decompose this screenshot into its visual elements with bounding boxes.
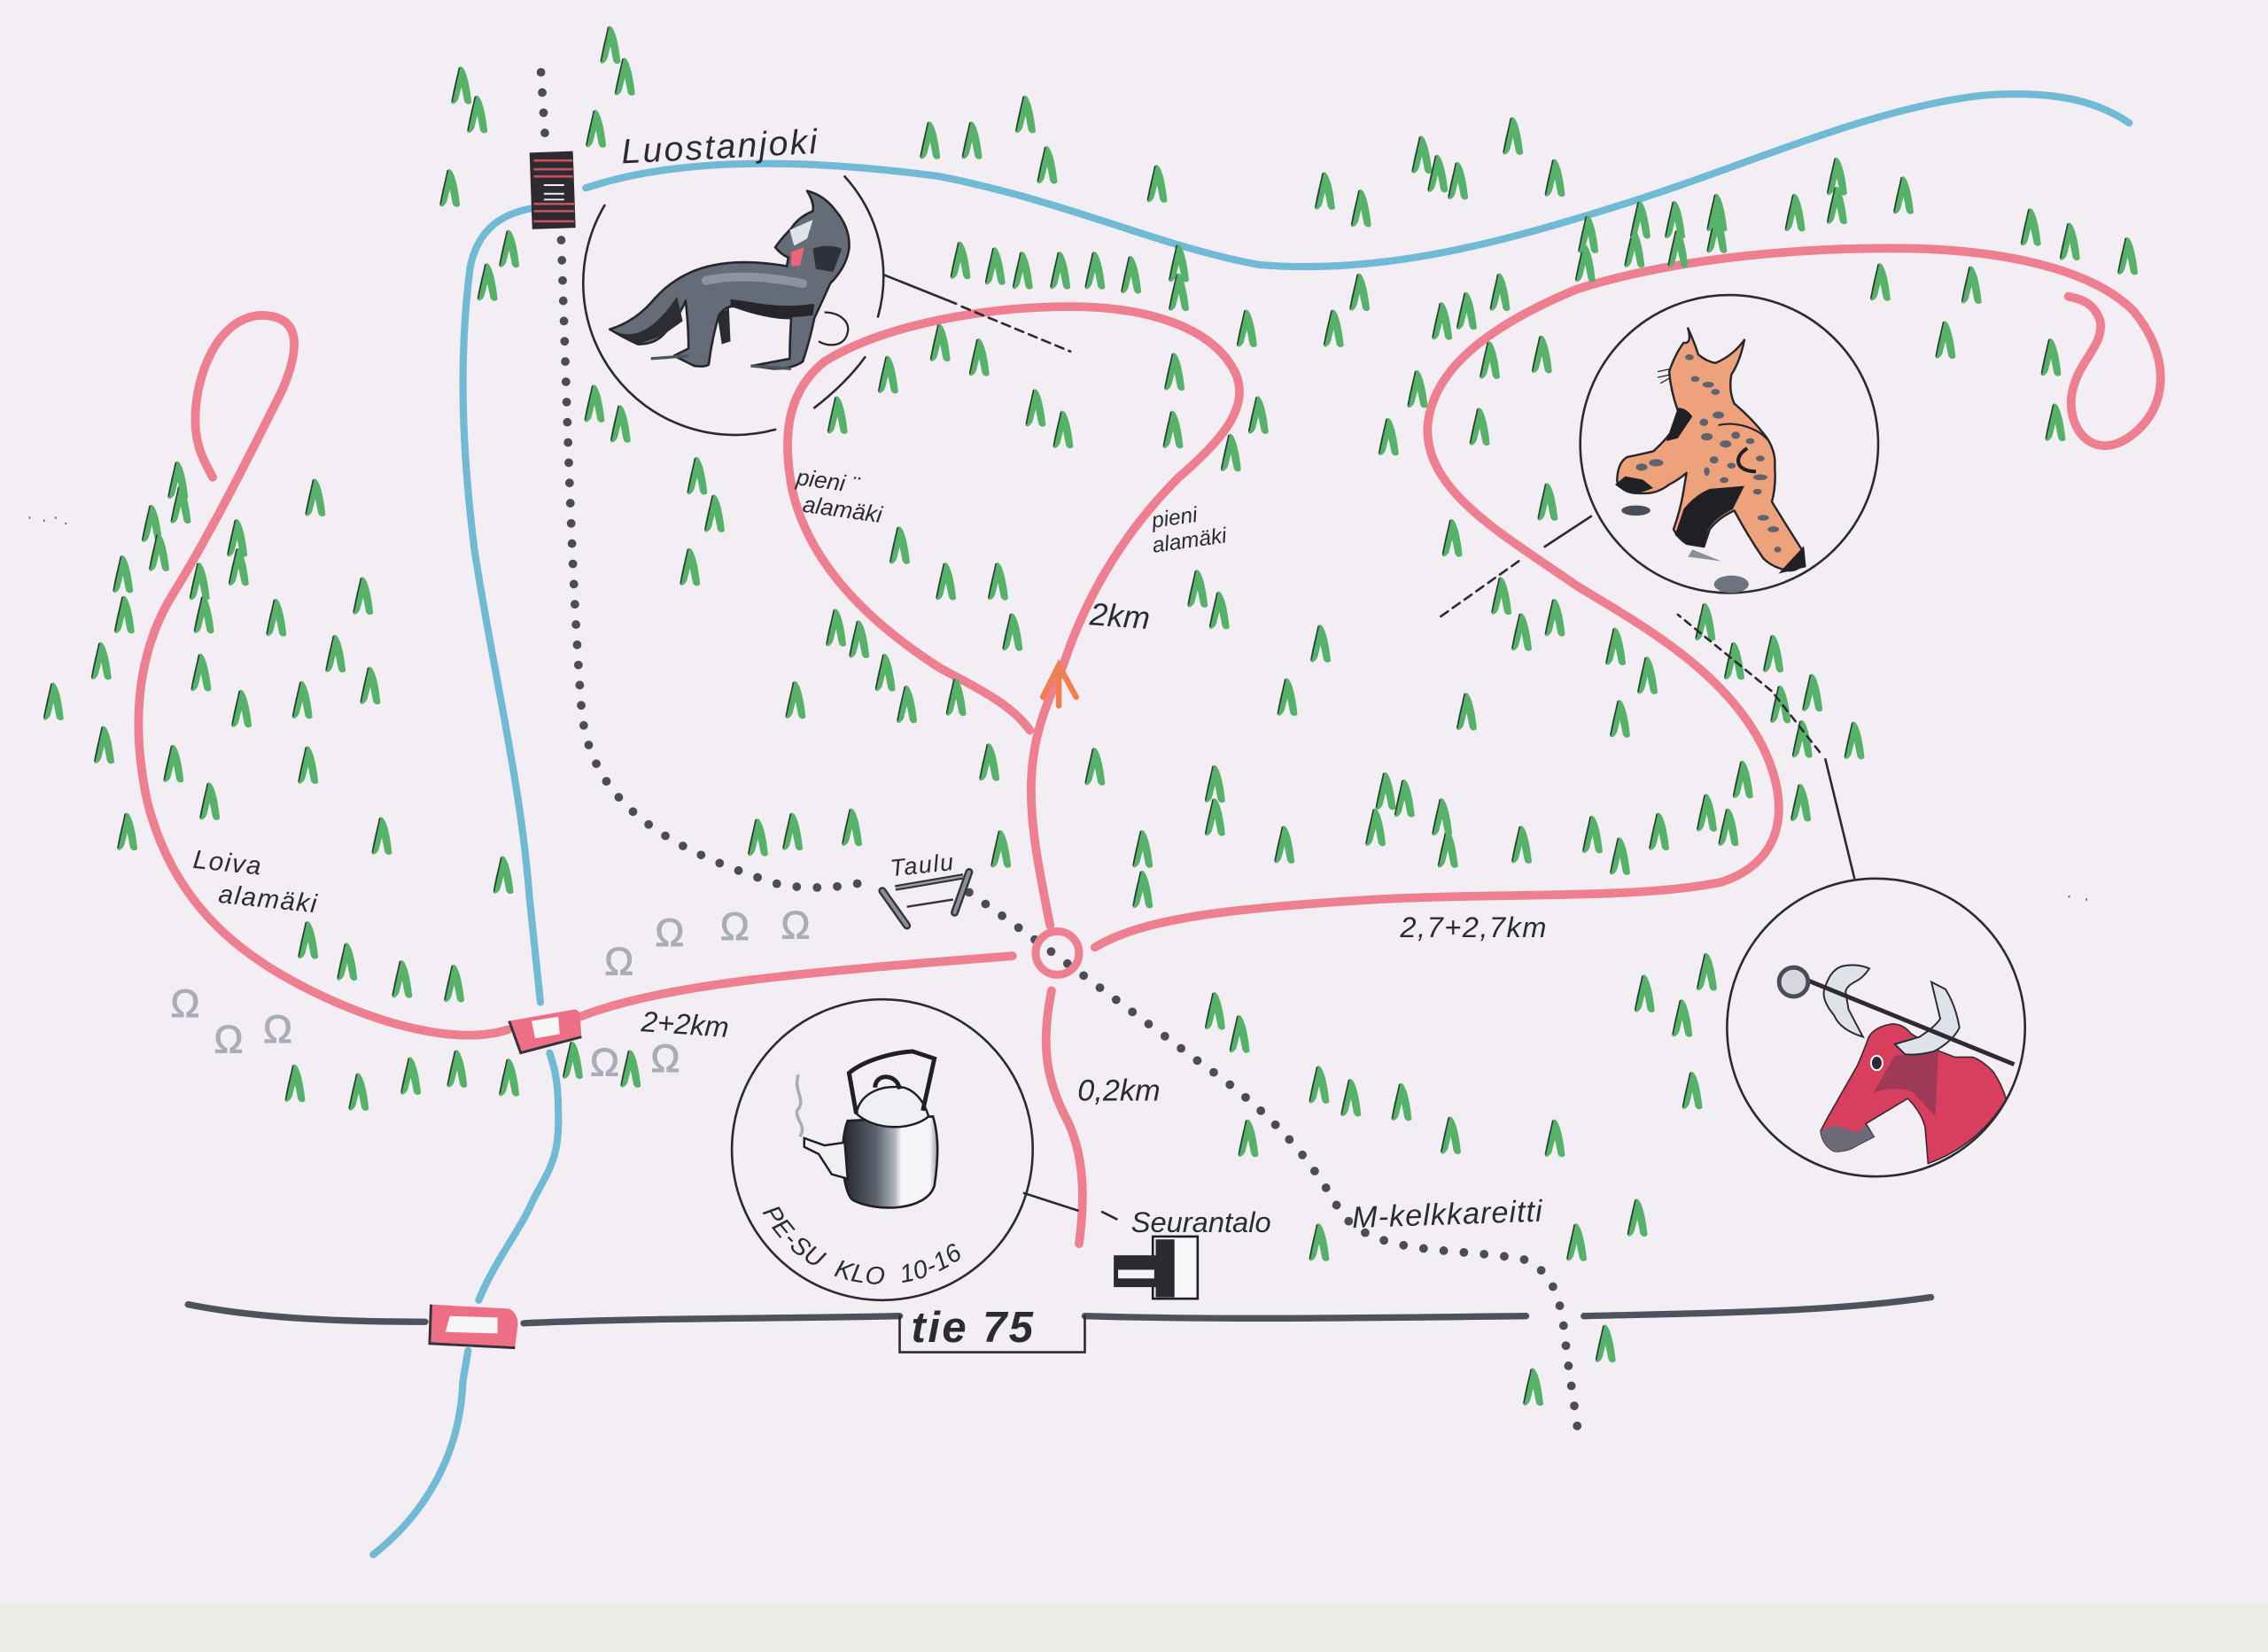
kettle opening hours: PE-SU KLO 10-16 <box>762 1206 960 1284</box>
scan specks <box>29 517 2087 900</box>
moose circle outline <box>1727 879 2025 1176</box>
label pieni alamaki right: alamäki <box>1151 524 1229 558</box>
lynx drawing <box>1617 329 1804 593</box>
direction arrow <box>1043 665 1076 706</box>
sign Taulu <box>882 849 969 926</box>
trees: north <box>439 26 2138 311</box>
sign Taulu: Taulu <box>889 849 956 881</box>
label 2+2km: 2+2km <box>640 1004 730 1043</box>
moose drawing <box>1779 965 2014 1163</box>
moose circle leaders <box>1678 615 1854 878</box>
scanner strip at bottom <box>0 1603 2268 1652</box>
trees: west <box>43 461 641 1111</box>
label 2,7+2,7km: 2,7+2,7km <box>1399 911 1548 943</box>
ski trail: bridge to junction <box>580 956 1013 1017</box>
grey rock symbols: Ω <box>604 940 633 983</box>
grey rock symbols: Ω <box>590 1042 619 1085</box>
label pieni alamaki right <box>1147 500 1229 558</box>
lynx circle outline <box>1581 295 1878 593</box>
label Loiva alamaki: alamäki <box>217 880 320 919</box>
grey rock symbols: Ω <box>651 1037 680 1081</box>
label tie 75: tie 75 <box>912 1304 1035 1352</box>
wolf drawing <box>610 191 850 368</box>
label 2km: 2km <box>1088 595 1151 636</box>
wolf circle leader <box>884 275 1070 352</box>
label pieni alamaki right: pieni <box>1149 503 1200 533</box>
grey rock symbols: Ω <box>720 905 750 949</box>
road bridge <box>430 1305 517 1348</box>
building Seurantalo <box>1114 1237 1198 1299</box>
road 75 <box>188 1297 1931 1353</box>
kettle drawing <box>796 1051 937 1207</box>
wolf circle <box>583 176 883 435</box>
trees: centre loop <box>585 309 1269 908</box>
label Seurantalo: Seurantalo <box>1131 1206 1271 1238</box>
label Pieni alamaki left <box>790 463 889 528</box>
ski trail: south branch <box>1046 990 1083 1244</box>
label Luostanjoki: Luostanjoki <box>620 123 820 171</box>
label M-kelkkareitti: M-kelkkareitti <box>1351 1195 1544 1235</box>
trees: east <box>1274 263 2065 875</box>
lynx circle <box>1581 295 1878 593</box>
snowmobile route dotted <box>541 73 1578 1431</box>
grey rock symbols: Ω <box>655 911 684 955</box>
grey rock symbols: Ω <box>171 982 199 1026</box>
grey rock symbols <box>171 904 810 1085</box>
wolf circle outline <box>583 176 883 435</box>
pink bridge on trail <box>509 1010 581 1053</box>
label 0,2km: 0,2km <box>1077 1074 1161 1107</box>
trail junction ring <box>1036 931 1079 974</box>
label Pieni alamaki left: alamäki <box>801 491 885 528</box>
kettle circle <box>730 997 1034 1302</box>
ski trail: centre loop <box>788 306 1239 926</box>
river Luostanjoki <box>373 94 2129 1555</box>
label Loiva alamaki: Loiva <box>191 845 264 881</box>
grey rock symbols: Ω <box>781 904 810 948</box>
dark bridge at top <box>530 151 576 229</box>
moose circle <box>1727 879 2025 1176</box>
ski trail: left loop <box>138 315 508 1035</box>
label Pieni alamaki left: pieni ¨ <box>794 463 862 499</box>
grey rock symbols: Ω <box>263 1008 292 1051</box>
lynx circle leaders <box>1439 516 1591 617</box>
kettle circle outline <box>732 999 1033 1300</box>
trees: south <box>1205 953 1717 1406</box>
grey rock symbols: Ω <box>214 1019 243 1062</box>
label Loiva alamaki <box>189 845 322 919</box>
ski trail: east loop <box>1095 248 2161 947</box>
kettle leader <box>1024 1193 1116 1219</box>
